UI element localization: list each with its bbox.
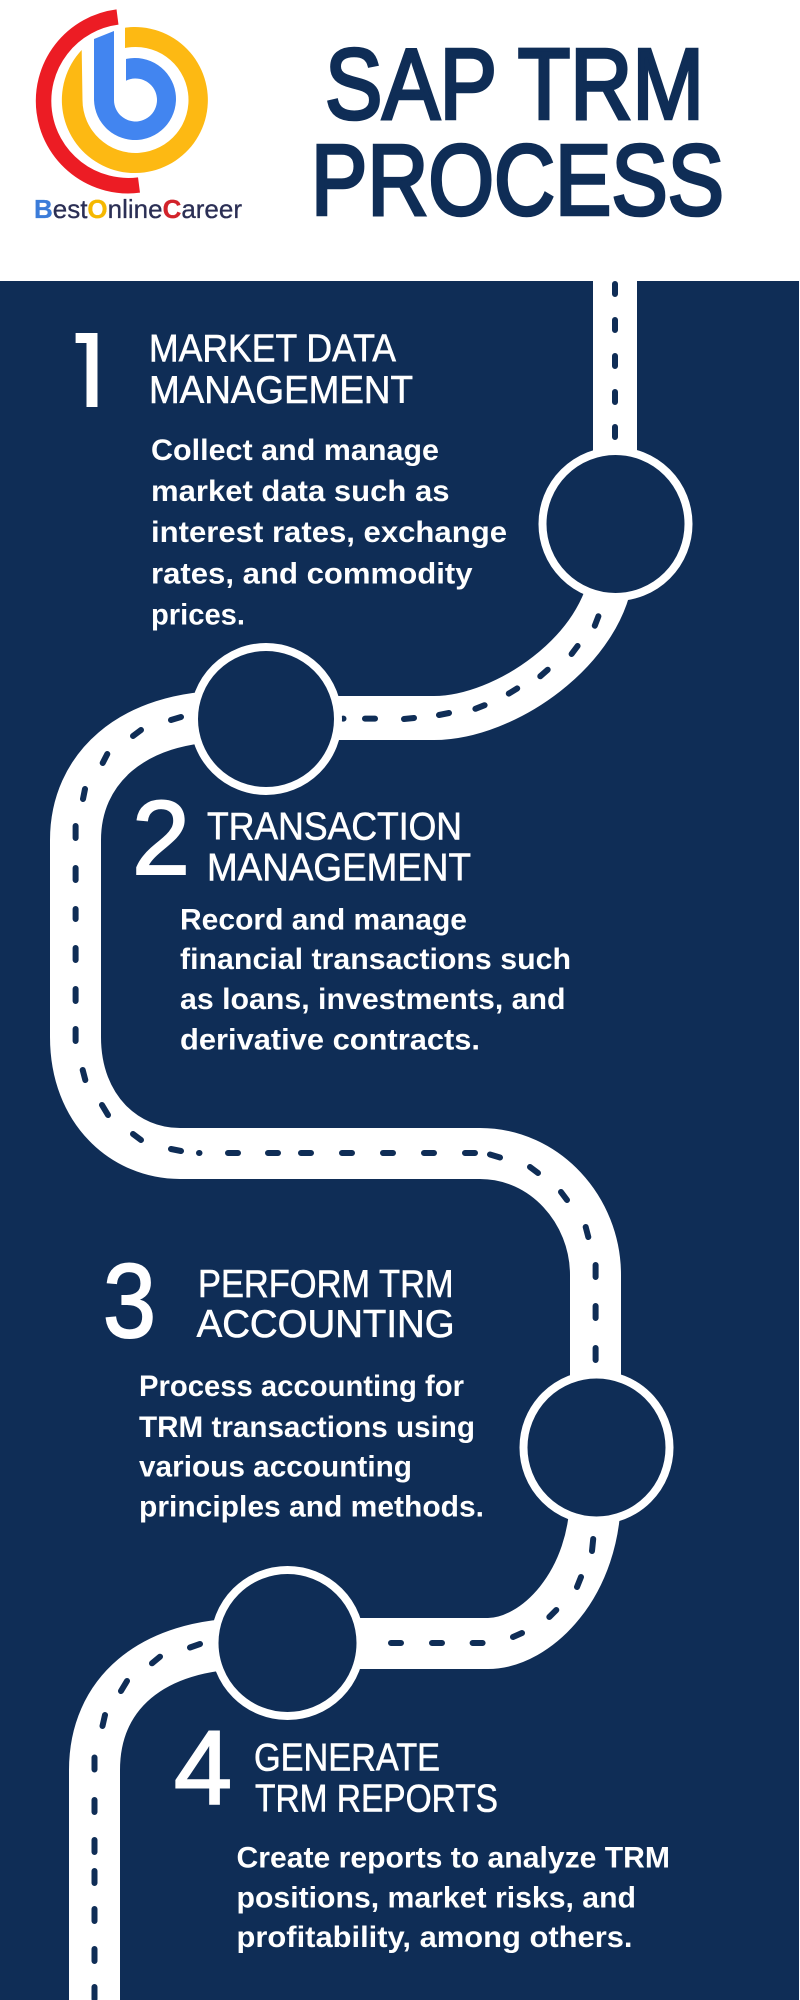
heading: market data management: MARKET DATA bbox=[149, 328, 396, 370]
heading: generate TRM reports: GENERATE bbox=[254, 1736, 440, 1780]
heading: generate TRM reports: TRM REPORTS bbox=[255, 1777, 498, 1820]
milestone circle 2 bbox=[194, 647, 338, 791]
number 2: 2 bbox=[132, 780, 190, 897]
milestone circle 3 bbox=[524, 1374, 670, 1520]
title bbox=[311, 28, 724, 236]
milestone circle 1 bbox=[542, 451, 688, 597]
heading: perform TRM accounting: ACCOUNTING bbox=[197, 1303, 455, 1346]
number 1 bbox=[76, 333, 98, 407]
title: PROCESS bbox=[311, 124, 724, 236]
body text 2: as loans, investments, and bbox=[180, 983, 566, 1016]
body text 1: prices. bbox=[151, 599, 245, 632]
body text 3: Process accounting for bbox=[139, 1370, 464, 1403]
title: SAP TRM bbox=[325, 28, 704, 140]
step 4 bbox=[174, 1710, 670, 1954]
body text 1: interest rates, exchange bbox=[151, 516, 507, 549]
winding road bbox=[76, 281, 615, 2000]
heading: transaction management: TRANSACTION bbox=[207, 806, 462, 848]
number 4: 4 bbox=[174, 1710, 232, 1827]
logo icon: red arc bbox=[44, 17, 139, 186]
step 1 bbox=[72, 306, 507, 632]
heading: generate TRM reports bbox=[254, 1736, 498, 1820]
step 2 bbox=[132, 780, 571, 1056]
heading: transaction management: MANAGEMENT bbox=[207, 846, 471, 890]
logo icon: blue letter b bbox=[94, 31, 176, 140]
body text 3: TRM transactions using bbox=[139, 1411, 475, 1444]
body text 2: Record and manage bbox=[180, 903, 467, 936]
logo: BestOnlineCareer bbox=[34, 17, 242, 224]
milestone circle 4 bbox=[214, 1570, 360, 1716]
heading: market data management bbox=[149, 328, 413, 412]
body text 3 bbox=[139, 1370, 484, 1524]
step 1: 1 bbox=[72, 306, 108, 452]
body text 1 bbox=[151, 434, 507, 632]
body text 3: various accounting bbox=[139, 1450, 412, 1484]
step 3 bbox=[103, 1243, 484, 1524]
body text 2 bbox=[180, 903, 571, 1056]
body text 4 bbox=[236, 1842, 670, 1954]
heading: perform TRM accounting: PERFORM TRM bbox=[198, 1263, 454, 1306]
number 3: 3 bbox=[103, 1243, 156, 1360]
logo wordmark: BestOnlineCareer bbox=[34, 194, 242, 224]
body text 2: derivative contracts. bbox=[180, 1024, 480, 1056]
body text 4: Create reports to analyze TRM bbox=[236, 1842, 670, 1875]
body text 4: profitability, among others. bbox=[236, 1921, 632, 1954]
body text 2: financial transactions such bbox=[180, 943, 571, 976]
body text 4: positions, market risks, and bbox=[236, 1882, 636, 1914]
road centre dashes bbox=[76, 284, 615, 1999]
heading: transaction management bbox=[207, 806, 471, 890]
logo icon: yellow ring bbox=[62, 27, 208, 173]
heading: market data management: MANAGEMENT bbox=[149, 369, 413, 412]
body text 1: market data such as bbox=[151, 475, 450, 508]
body text 3: principles and methods. bbox=[139, 1491, 484, 1524]
heading: perform TRM accounting bbox=[197, 1263, 455, 1346]
body text 1: rates, and commodity bbox=[151, 558, 473, 590]
body text 1: Collect and manage bbox=[151, 434, 439, 467]
